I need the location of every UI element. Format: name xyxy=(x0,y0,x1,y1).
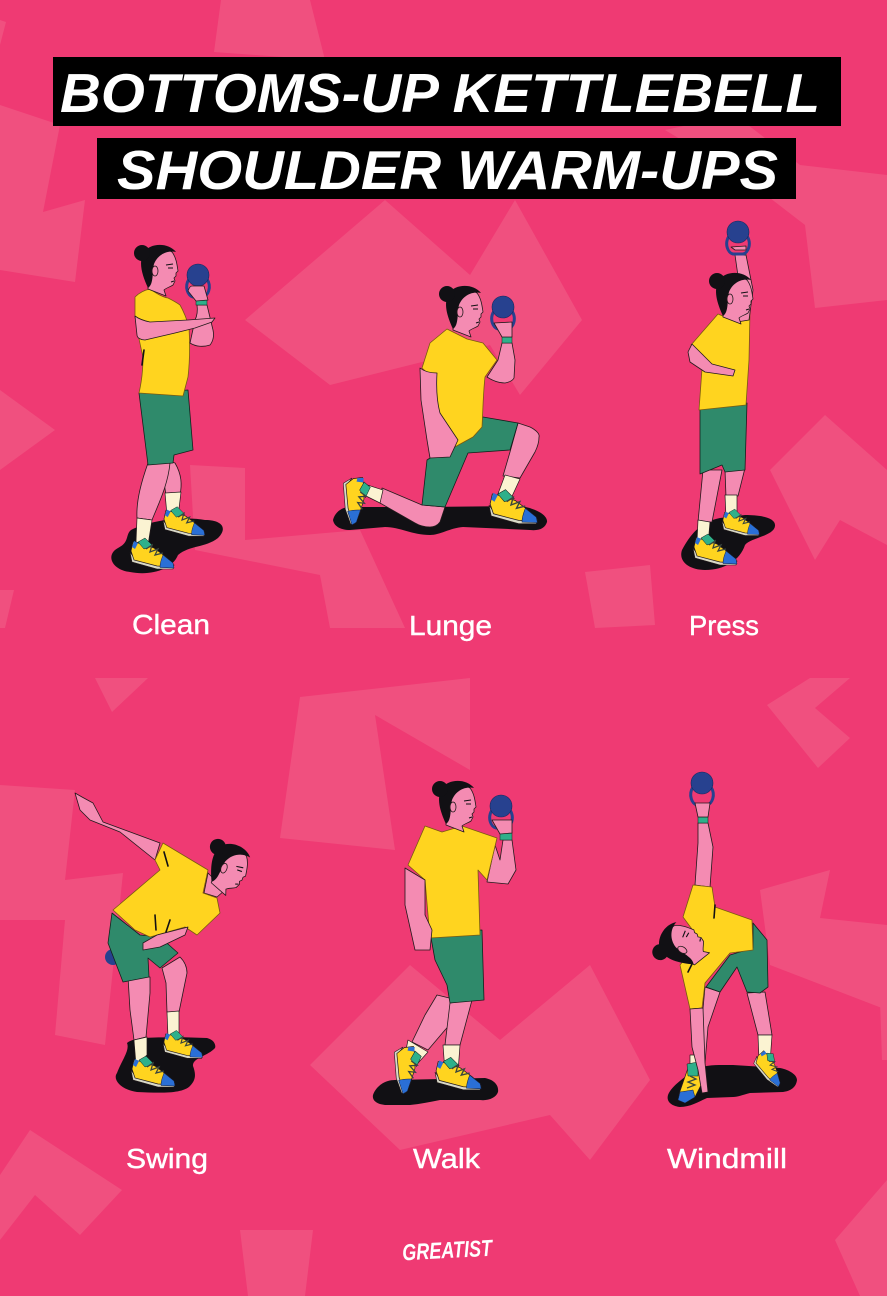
figure: walk xyxy=(373,781,516,1105)
label: Walk: Walk xyxy=(413,1143,481,1174)
label: Press: Press xyxy=(689,610,759,641)
label: Windmill: Windmill xyxy=(667,1143,787,1174)
figure: swing xyxy=(75,793,255,1093)
logo: Greatist: GREATIST xyxy=(401,1235,494,1265)
title: SHOULDER WARM-UPS xyxy=(117,139,778,201)
title xyxy=(53,57,841,201)
label: Swing: Swing xyxy=(126,1143,208,1174)
figure: windmill xyxy=(649,772,797,1107)
label: Lunge: Lunge xyxy=(409,610,492,641)
figure: clean xyxy=(111,245,223,573)
figure: press xyxy=(681,221,775,570)
figure: lunge xyxy=(333,286,547,535)
label: Clean: Clean xyxy=(132,609,210,640)
title: BOTTOMS-UP KETTLEBELL xyxy=(60,62,820,124)
